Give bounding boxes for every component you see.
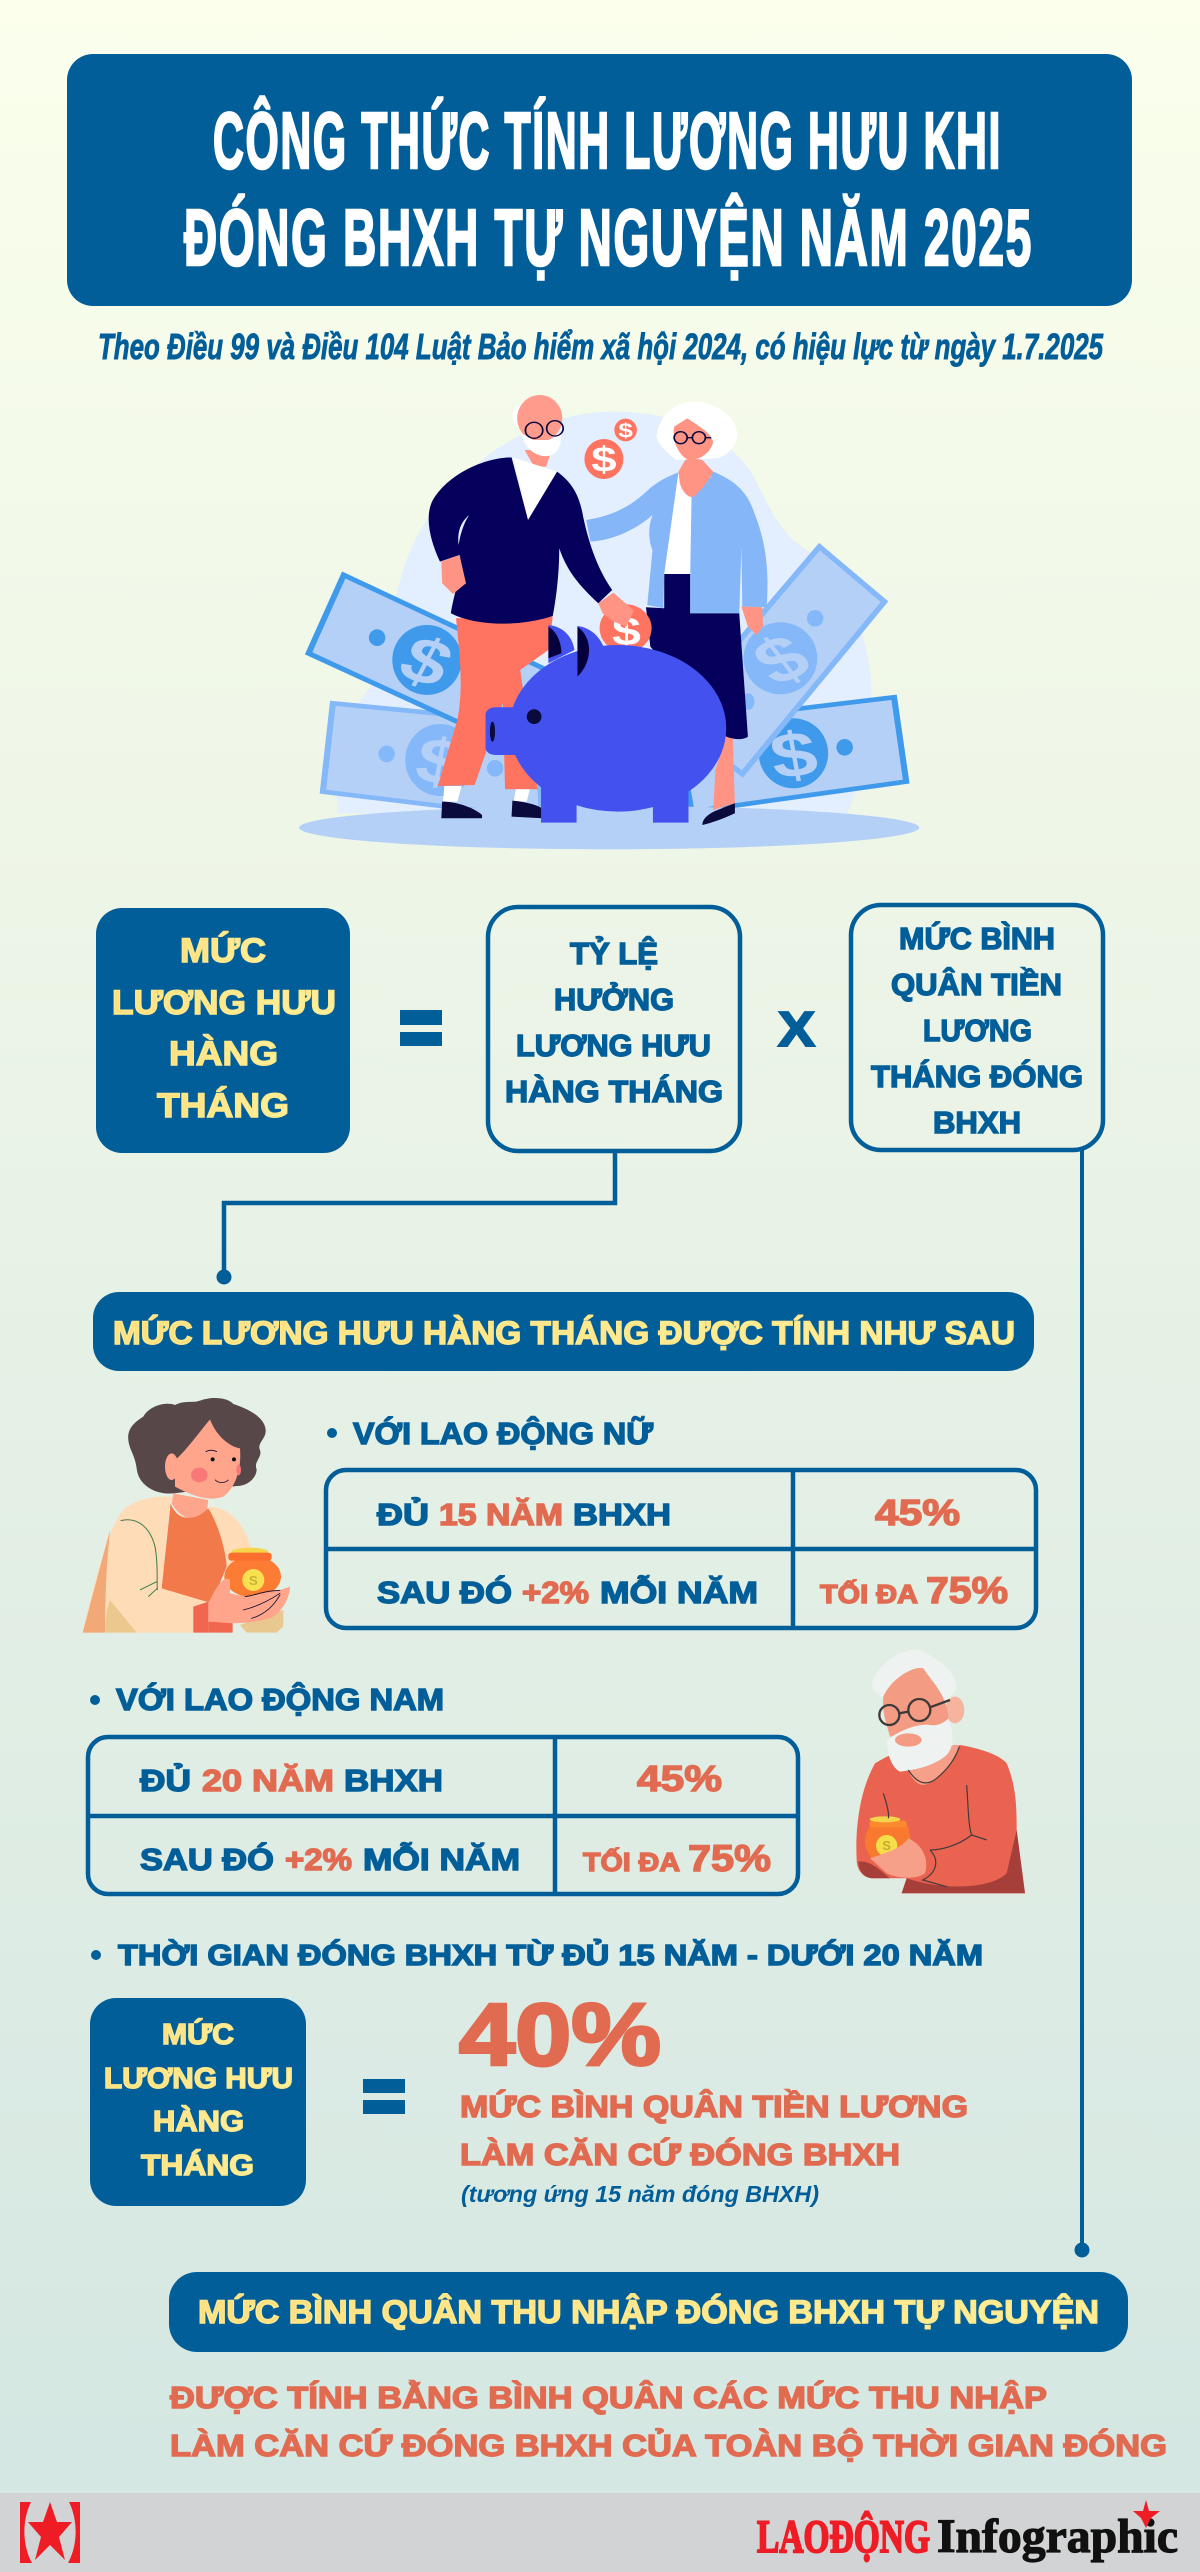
- illustration: elderly couple with piggy bank: [299, 395, 919, 849]
- bullet heading: male workers: VỚI LAO ĐỘNG NAM: [116, 1681, 444, 1717]
- logo: Lao Dong Infographic: [757, 2500, 1178, 2563]
- table: male workers: 75%: [688, 1838, 771, 1879]
- section heading: pension rate: MỨC LƯƠNG HƯU HÀNG THÁNG ĐƯỢC TÍNH NHƯ SAU: [113, 1315, 1015, 1351]
- table: male workers: MỖI NĂM: [363, 1841, 520, 1877]
- connector: rate box to rate section: [216, 1152, 615, 1284]
- table: female workers: 15 NĂM: [439, 1497, 563, 1532]
- text block: income explanation: LÀM CĂN CỨ ĐÓNG BHXH CỦA TOÀN BỘ THỜI GIAN ĐÓNG: [170, 2427, 1167, 2463]
- formula: average salary box: THÁNG ĐÓNG: [871, 1058, 1083, 1094]
- icon: old man holding coin pot: [856, 1650, 1025, 1893]
- connector: salary box to income section: [1074, 1150, 1090, 2258]
- table: male workers: 20 NĂM: [202, 1763, 334, 1798]
- formula: pension box for short contribution: MỨC: [162, 2017, 234, 2051]
- formula: monthly pension box: THÁNG: [157, 1087, 289, 1125]
- formula: pension rate box: TỶ LỆ: [570, 935, 658, 971]
- table: male workers: TỐI ĐA: [583, 1847, 680, 1877]
- formula: average salary box: QUÂN TIỀN: [891, 966, 1062, 1002]
- illustration: elderly couple with piggy bank: $: [388, 621, 465, 701]
- title banner: [67, 54, 1132, 306]
- illustration: elderly couple with piggy bank: $: [738, 620, 824, 699]
- table: male workers: SAU ĐÓ: [140, 1841, 274, 1877]
- formula: monthly pension box: LƯƠNG HƯU: [112, 984, 336, 1022]
- table: female workers: 75%: [926, 1570, 1008, 1611]
- formula: pension box for short contribution: [90, 1998, 306, 2206]
- result: 40 percent of average salary: MỨC BÌNH QUÂN TIỀN LƯƠNG: [460, 2088, 968, 2124]
- table: female workers: BHXH: [573, 1497, 671, 1532]
- icon: old man holding coin pot: S: [882, 1839, 891, 1853]
- formula: pension rate box: [488, 907, 740, 1151]
- text block: income explanation: [170, 2379, 1167, 2463]
- bullet heading: 15 to under 20 years: THỜI GIAN ĐÓNG BHXH TỪ ĐỦ 15 NĂM - DƯỚI 20 NĂM: [118, 1938, 983, 1972]
- table: female workers: MỖI NĂM: [600, 1574, 758, 1610]
- formula: pension box for short contribution: THÁNG: [141, 2148, 254, 2182]
- table: female workers: +2%: [522, 1575, 589, 1610]
- illustration: elderly couple with piggy bank: $: [765, 717, 823, 793]
- table: female workers: SAU ĐÓ: [377, 1574, 512, 1610]
- logo: Lao Dong Infographic: Infographic: [937, 2510, 1178, 2563]
- formula: monthly pension box: [96, 908, 350, 1153]
- illustration: elderly couple with piggy bank: $: [612, 609, 641, 654]
- illustration: elderly couple with piggy bank: $: [618, 419, 633, 442]
- result: 40 percent of average salary: 40%: [459, 1985, 661, 2084]
- formula: average salary box: MỨC BÌNH: [899, 920, 1055, 956]
- table: female workers: ĐỦ: [377, 1496, 429, 1532]
- table: female workers: 45%: [875, 1492, 960, 1533]
- result: 40 percent of average salary: [459, 1985, 968, 2207]
- section heading: average income: [169, 2272, 1128, 2352]
- section heading: pension rate: [93, 1292, 1034, 1371]
- section heading: average income: MỨC BÌNH QUÂN THU NHẬP ĐÓNG BHXH TỰ NGUYỆN: [198, 2294, 1099, 2330]
- formula: monthly pension box: MỨC: [180, 932, 266, 970]
- formula: monthly pension box: HÀNG: [169, 1035, 278, 1073]
- formula: average salary box: [851, 905, 1103, 1150]
- formula: pension rate box: HÀNG THÁNG: [505, 1074, 723, 1109]
- bullet heading: female workers: VỚI LAO ĐỘNG NỮ: [353, 1415, 653, 1451]
- formula: pension rate box: LƯƠNG HƯU: [516, 1028, 711, 1063]
- illustration: elderly couple with piggy bank: $: [591, 440, 617, 479]
- table: female workers: TỐI ĐA: [820, 1579, 918, 1609]
- table: male workers: BHXH: [344, 1763, 443, 1798]
- formula: pension box for short contribution: HÀNG: [153, 2104, 244, 2138]
- logo: Lao Dong Infographic: LAOĐỘNG: [757, 2511, 930, 2563]
- icon: woman holding coin pot: [83, 1398, 290, 1633]
- table: female workers: [326, 1468, 1036, 1629]
- result: 40 percent of average salary: (tương ứng 15 năm đóng BHXH): [461, 2181, 819, 2207]
- icon: woman holding coin pot: S: [249, 1573, 258, 1588]
- equals sign: [400, 1010, 442, 1046]
- table: male workers: [88, 1735, 798, 1895]
- illustration: elderly couple with piggy bank: $: [411, 723, 469, 799]
- formula: pension box for short contribution: LƯƠNG HƯU: [104, 2063, 293, 2095]
- logo: red star emblem: [20, 2502, 80, 2563]
- formula: pension rate box: HƯỞNG: [554, 981, 674, 1017]
- formula: average salary box: LƯƠNG: [923, 1013, 1032, 1048]
- footer bar: [0, 2493, 1200, 2572]
- text block: income explanation: ĐƯỢC TÍNH BẰNG BÌNH QUÂN CÁC MỨC THU NHẬP: [170, 2379, 1047, 2415]
- table: male workers: +2%: [285, 1842, 352, 1877]
- table: male workers: ĐỦ: [140, 1762, 191, 1798]
- result: 40 percent of average salary: LÀM CĂN CỨ ĐÓNG BHXH: [460, 2136, 900, 2172]
- equals sign: [363, 2079, 405, 2114]
- multiply sign: X: [778, 1003, 815, 1057]
- formula: average salary box: BHXH: [933, 1105, 1021, 1140]
- table: male workers: 45%: [637, 1758, 722, 1799]
